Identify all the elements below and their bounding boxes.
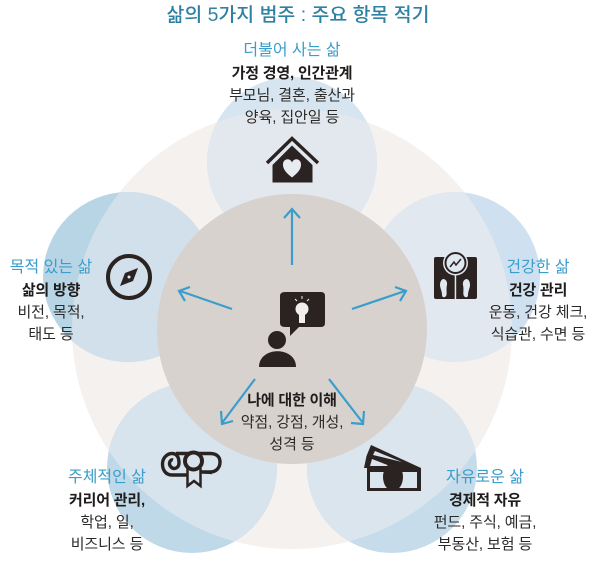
text: right: 운동, 건강 체크, bbox=[489, 304, 587, 321]
circle: left bbox=[43, 192, 213, 362]
text: bottom left: 커리어 관리, bbox=[69, 492, 145, 509]
icon: person with idea bubble bbox=[259, 292, 325, 367]
text: bottom right bbox=[434, 468, 536, 553]
text: top: 더불어 사는 삶 bbox=[243, 41, 341, 59]
text: bottom right: 경제적 자유 bbox=[449, 492, 521, 509]
text: bottom left: 비즈니스 등 bbox=[71, 536, 144, 553]
text: left bbox=[10, 258, 93, 343]
text: left: 비전, 목적, bbox=[17, 304, 85, 321]
text: right bbox=[489, 258, 587, 343]
text: bottom left bbox=[68, 468, 146, 553]
text: bottom right: 펀드, 주식, 예금, bbox=[434, 514, 536, 531]
arrow: bottom right bbox=[329, 379, 364, 424]
text: top: 부모님, 결혼, 출산과 bbox=[229, 87, 355, 104]
text: bottom left: 학업, 일, bbox=[80, 514, 134, 531]
circle: right bbox=[370, 192, 540, 362]
left foot bbox=[440, 279, 447, 297]
title: 삶의 5가지 범주 : 주요 항목 적기 bbox=[166, 4, 430, 26]
icon: scale bbox=[434, 250, 477, 299]
text: left: 삶의 방향 bbox=[22, 282, 81, 299]
text: top: 양육, 집안일 등 bbox=[245, 109, 339, 126]
icon: diploma bbox=[162, 452, 220, 486]
text: right: 건강 관리 bbox=[509, 282, 567, 299]
text: center: 약점, 강점, 개성, bbox=[241, 414, 343, 431]
text: bottom right: 자유로운 삶 bbox=[446, 468, 524, 486]
background circle bbox=[72, 109, 512, 549]
text: top: 가정 경영, 인간관계 bbox=[232, 65, 352, 82]
arrow: right bbox=[352, 287, 406, 309]
text: right: 건강한 삶 bbox=[506, 258, 570, 276]
icon: money bbox=[364, 445, 421, 491]
text: left: 목적 있는 삶 bbox=[10, 258, 93, 276]
text: left: 태도 등 bbox=[28, 326, 74, 343]
icon: house with heart bbox=[267, 138, 318, 182]
text: center: 나에 대한 이해 bbox=[247, 392, 337, 409]
center circle bbox=[157, 194, 427, 464]
arrow: up bbox=[284, 209, 300, 265]
text: bottom left: 주체적인 삶 bbox=[68, 468, 146, 486]
circle: bottom left bbox=[107, 383, 277, 553]
circle: top bbox=[207, 77, 377, 212]
icon: compass bbox=[108, 256, 150, 298]
circle: bottom right bbox=[307, 383, 477, 553]
arrow: left bbox=[179, 287, 232, 309]
arrow: bottom left bbox=[221, 379, 255, 424]
text: right: 식습관, 수면 등 bbox=[491, 326, 585, 343]
right foot bbox=[463, 279, 470, 297]
text: top bbox=[229, 41, 355, 126]
text: center: 성격 등 bbox=[269, 436, 315, 453]
text: center bbox=[241, 392, 343, 453]
text: bottom right: 부동산, 보험 등 bbox=[438, 536, 532, 553]
